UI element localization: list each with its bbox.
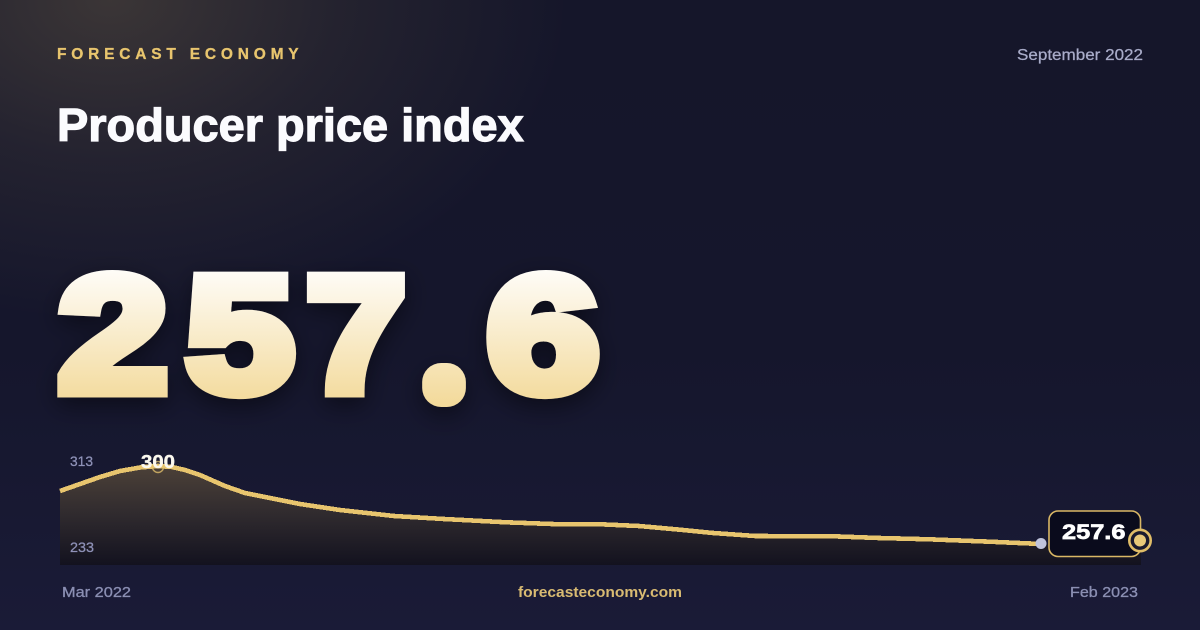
brand heading: FORECAST ECONOMY [57, 46, 303, 63]
start date label: Mar 2022 [62, 585, 131, 601]
latest value callout: 257.6 [1062, 520, 1125, 544]
big value: 2 [58, 243, 168, 426]
big value [58, 243, 599, 427]
latest point dot [1036, 538, 1046, 549]
big value: . [438, 353, 450, 397]
area under the line [60, 466, 1141, 565]
axis max label: 313 [70, 454, 93, 469]
peak marker [152, 462, 164, 472]
axis min label: 233 [70, 540, 94, 555]
peak value: 300 [141, 452, 175, 472]
latest value callout [1049, 511, 1140, 556]
price line [60, 466, 1041, 544]
end date label: Feb 2023 [1070, 585, 1138, 601]
big value: 7 [306, 244, 406, 426]
title: Producer price index [57, 99, 524, 151]
big value: 5 [186, 244, 294, 427]
website: forecasteconomy.com [518, 585, 682, 601]
latest marker [1129, 530, 1151, 551]
line chart [60, 452, 1151, 565]
date: September 2022 [1017, 47, 1143, 64]
big value: 6 [487, 243, 599, 426]
